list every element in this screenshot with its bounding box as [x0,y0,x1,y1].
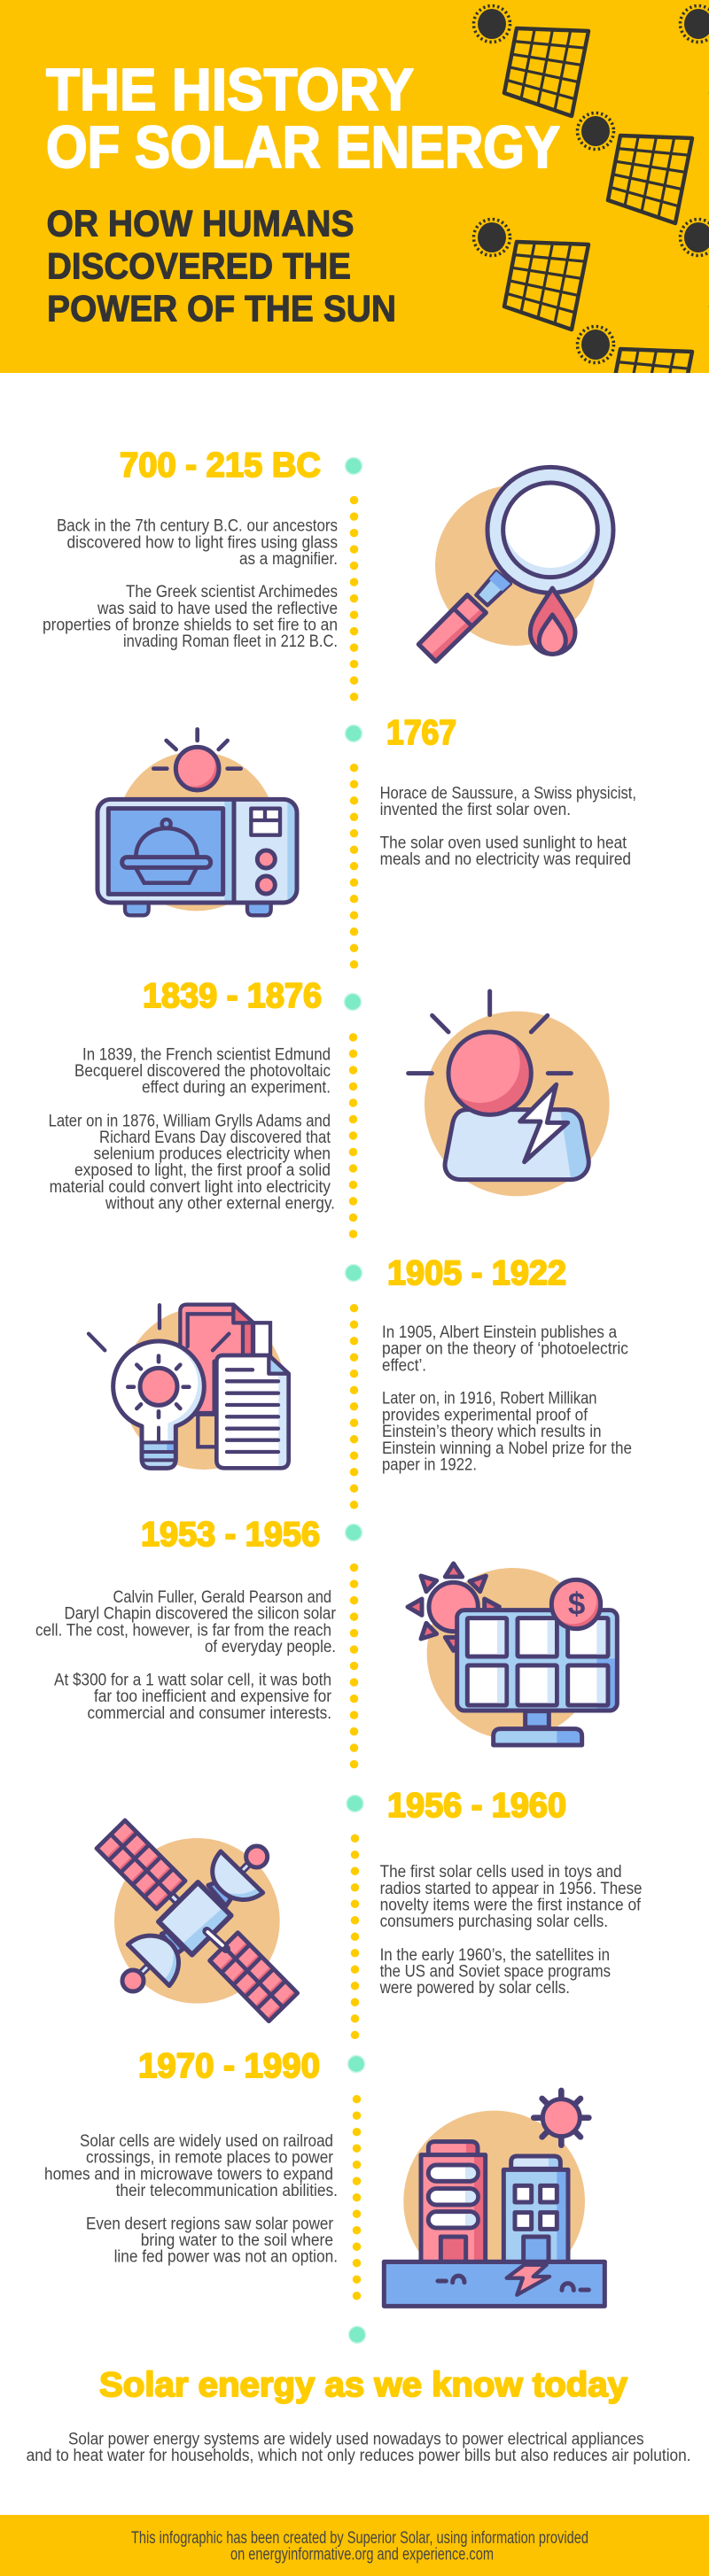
footer credit text: This infographic has been created by Superior Solar, using information provided [131,2529,588,2548]
body text: properties of bronze shields to set fire to an [43,617,338,634]
icon: solar panel, sun and coin: $ [568,1587,585,1622]
body text [44,2132,338,2267]
timeline marker [346,1524,362,1541]
panel: today [27,2366,691,2465]
body text: Richard Evans Day discovered that [99,1129,331,1147]
heading: Solar energy as we know today [99,2366,627,2404]
body text: effect’. [382,1356,426,1375]
body text: was said to have used the reflective [97,600,338,618]
body text [382,1323,632,1474]
body text: their telecommunication abilities. [116,2182,338,2200]
body text: Einstein’s theory which results in [382,1423,602,1441]
body text: In the early 1960’s, the satellites in [380,1946,610,1965]
body text: Becquerel discovered the photovoltaic [74,1062,331,1081]
body text: Calvin Fuller, Gerald Pearson and [113,1588,331,1607]
body text: provides experimental proof of [382,1406,588,1424]
body text: material could convert light into electricity [50,1178,331,1197]
footer credit text: on energyinformative.org and experience.com [230,2546,494,2564]
body text: In 1839, the French scientist Edmund [82,1045,331,1064]
icon: solar oven [97,729,297,915]
panel: 1767 [97,714,636,915]
body text: radios started to appear in 1956. These [380,1880,642,1898]
subtitle: OR HOW HUMANS [46,202,354,244]
body text: Solar power energy systems are widely used nowadays to power electrical appliances [68,2430,643,2448]
header banner [0,0,709,373]
body text: invading Roman fleet in 212 B.C. [123,632,338,651]
body text [35,1588,337,1723]
body text: invented the first solar oven. [380,801,571,819]
body text: meals and no electricity was required [380,850,631,869]
body text: consumers purchasing solar cells. [380,1913,608,1931]
panel: 1956 - 1960 [97,1787,642,2021]
panel: 1970 - 1990 [44,2047,604,2306]
timeline marker [346,725,362,742]
body text: Solar cells are widely used on railroad [80,2132,333,2151]
timeline marker [346,1265,362,1281]
timeline end marker [349,2326,365,2343]
subtitle: POWER OF THE SUN [47,287,396,330]
body text: commercial and consumer interests. [87,1704,331,1723]
icon: person with lightning bolt [409,991,610,1196]
title: OF SOLAR ENERGY [46,114,560,181]
pattern: suns and solar panels [471,4,709,373]
body text: At $300 for a 1 watt solar cell, it was both [54,1672,331,1690]
body text [27,2430,691,2465]
panel: 700 - 215 BC [43,446,613,662]
body text: cell. The cost, however, is far from the reach [35,1621,331,1640]
subtitle [46,202,396,330]
body text: far too inefficient and expensive for [94,1688,332,1706]
year heading: 1905 - 1922 [387,1254,566,1292]
year heading: 700 - 215 BC [120,446,321,485]
body text: The Greek scientist Archimedes [126,583,338,601]
icon: buildings with sun and lightning [384,2091,604,2306]
icon: satellite [97,1820,298,2021]
body text: exposed to light, the first proof a solid [74,1161,331,1180]
year heading: 1970 - 1990 [138,2047,320,2085]
body text: Einstein winning a Nobel prize for the [382,1439,632,1458]
body text: Daryl Chapin discovered the silicon solar [64,1605,337,1624]
body text: bring water to the soil where [141,2231,333,2250]
body text: as a magnifier. [239,550,338,569]
body text: crossings, in remote places to power [86,2149,334,2168]
body text: novelty items were the first instance of [380,1896,642,1915]
panel: 1839 - 1876 [49,977,610,1214]
title: THE HISTORY [46,57,414,123]
body text: homes and in microwave towers to expand [44,2165,333,2184]
timeline marker [347,2055,365,2073]
year heading: 1956 - 1960 [387,1787,566,1825]
body text [380,784,636,869]
body text: Later on, in 1916, Robert Millikan [382,1390,597,1408]
body text: Back in the 7th century B.C. our ancestors [57,517,338,536]
title [46,57,560,181]
body text [43,517,338,651]
body text: discovered how to light fires using glass [67,533,338,552]
icon: solar panel, sun and coin [408,1563,617,1745]
year heading: 1953 - 1956 [141,1516,320,1554]
body text [379,1863,642,1998]
body text [49,1045,335,1214]
body text: were powered by solar cells. [379,1979,570,1998]
body text: paper on the theory of ‘photoelectric [382,1340,628,1359]
body text: Even desert regions saw solar power [86,2215,334,2233]
body text: effect during an experiment. [142,1079,331,1098]
year heading: 1767 [386,714,456,752]
timeline marker [344,994,362,1010]
panel: 1905 - 1922 [89,1254,632,1474]
icon: magnifier and flame [418,467,613,662]
footer [0,2515,709,2576]
body text: of everyday people. [205,1638,336,1657]
body text: Later on in 1876, William Grylls Adams and [49,1113,331,1130]
body text: Horace de Saussure, a Swiss physicist, [380,784,636,803]
body text: the US and Soviet space programs [380,1963,611,1982]
subtitle: DISCOVERED THE [47,244,351,287]
body text: The solar oven used sunlight to heat [380,834,627,852]
body text: line fed power was not an option. [114,2248,338,2267]
panel: 1953 - 1956 [35,1516,617,1745]
year heading: 1839 - 1876 [143,977,322,1015]
icon: light bulb and documents [89,1305,289,1470]
timeline marker [347,1795,363,1812]
timeline marker [346,457,362,475]
timeline dotted line [353,500,356,2296]
body text: without any other external energy. [105,1194,335,1214]
body text: The first solar cells used in toys and [380,1863,622,1882]
body text: selenium produces electricity when [94,1144,331,1164]
body text: In 1905, Albert Einstein publishes a [382,1323,617,1342]
body text: paper in 1922. [382,1456,477,1474]
footer credit text [131,2529,588,2564]
